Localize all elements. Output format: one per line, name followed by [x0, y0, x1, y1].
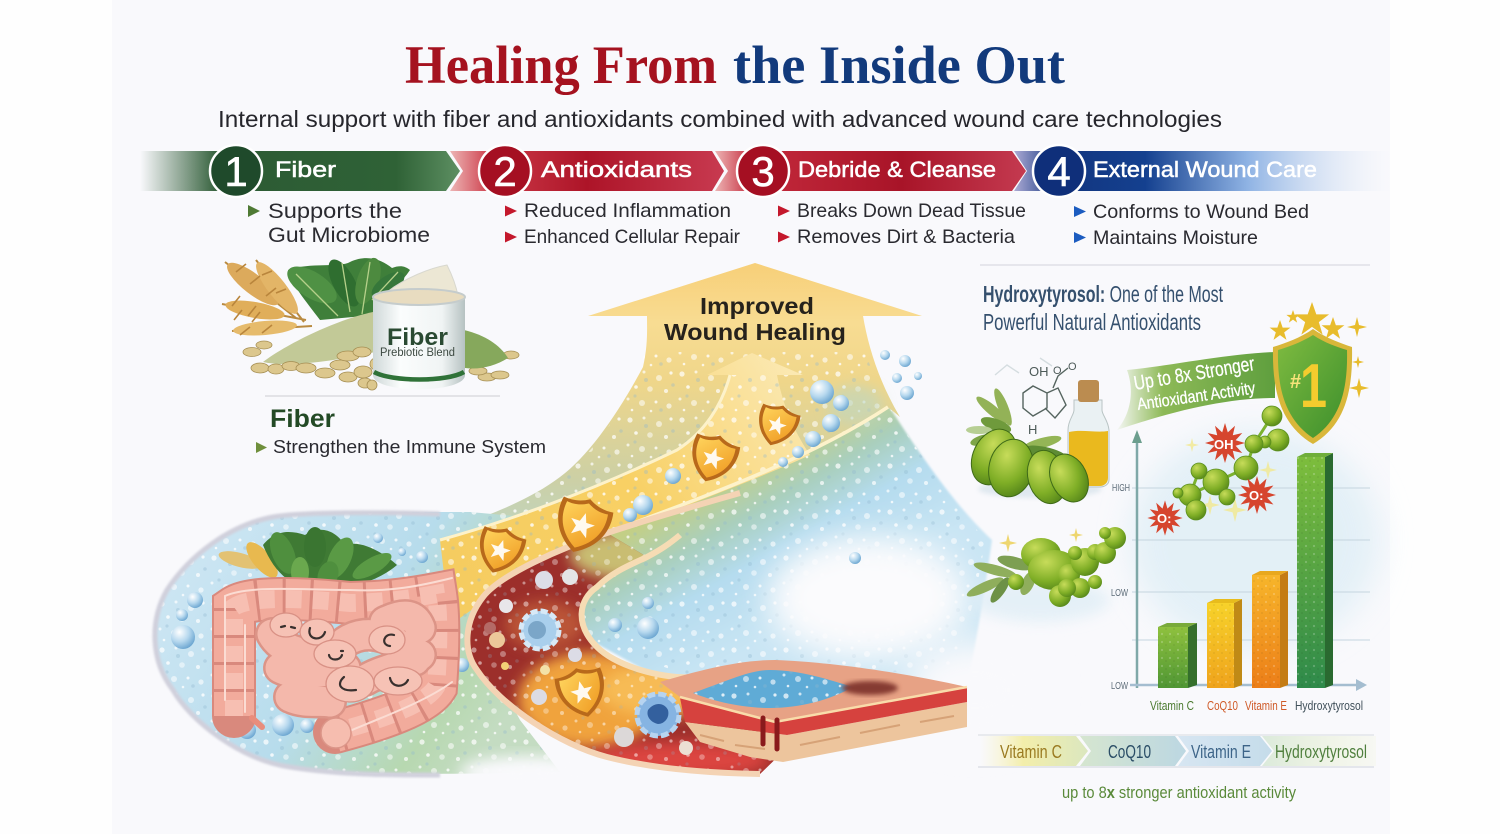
- step 2: antioxidants: [450, 145, 724, 197]
- step 3: debride and cleanse: 3: [751, 148, 775, 195]
- shield: number one: 1: [1300, 352, 1327, 421]
- icon: olive branch: [965, 527, 1126, 607]
- icon: powder mound: [263, 312, 375, 364]
- icon: molecule diagram: [995, 358, 1077, 437]
- appendix: [252, 718, 262, 727]
- fiber sub-section: Strengthen the Immune System: [273, 436, 546, 457]
- molecule chain with free radicals: [1147, 406, 1289, 536]
- colon end: [321, 718, 351, 748]
- step 1: fiber: [140, 145, 460, 197]
- radical: O2 left: [1147, 500, 1183, 536]
- icon: fiber jar: Prebiotic Blend: [380, 347, 455, 359]
- golden band with shields path: [440, 353, 888, 625]
- shield: number one: #: [1290, 371, 1301, 393]
- title: Healing From: [405, 35, 717, 95]
- icon: immune cells: [484, 569, 693, 755]
- icon: molecule diagram: H: [1028, 422, 1037, 437]
- bullets: fiber: [248, 200, 430, 247]
- bullets: debride: [778, 200, 1026, 248]
- bar labels: Vitamin E: [1245, 699, 1287, 713]
- title: the Inside Out: [733, 35, 1065, 95]
- axis labels: [1111, 482, 1130, 692]
- wound block illustration: [660, 660, 967, 762]
- fiber sub-section: Fiber: [270, 405, 335, 433]
- bar labels: Vitamin C: [1150, 699, 1194, 713]
- chevron: vitamin e: Vitamin E: [1191, 742, 1251, 762]
- step 4: external wound care: 4: [1047, 148, 1071, 195]
- step 2: antioxidants: 2: [493, 148, 517, 195]
- step 3: debride and cleanse: Debride & Cleanse: [798, 157, 996, 182]
- bullets: external care: Conforms to Wound Bed: [1093, 201, 1309, 223]
- icon: molecule diagram: OH: [1029, 364, 1048, 379]
- axis labels: LOW: [1111, 680, 1128, 692]
- bar: hydroxytyrosol: [1297, 453, 1333, 688]
- gut illustration: [217, 527, 452, 748]
- chevron: hydroxytyrosol: Hydroxytyrosol: [1275, 742, 1367, 762]
- shield: number one: [1270, 302, 1369, 444]
- icon: seeds: [243, 341, 519, 390]
- bullets: external care: [1074, 201, 1309, 249]
- bar labels: [1150, 699, 1363, 713]
- fiber product illustration: [222, 255, 519, 390]
- label: improved wound healing: Improved: [700, 293, 814, 319]
- bullets: debride: Breaks Down Dead Tissue: [797, 200, 1026, 222]
- step 2: antioxidants: Antioxidants: [541, 157, 692, 182]
- divider right panel: [980, 264, 1370, 266]
- icon: fiber jar: Fiber: [387, 324, 448, 351]
- chevron: coq10: [1080, 736, 1186, 766]
- icon: molecule diagram: O: [1053, 365, 1062, 377]
- gut capsule: [155, 512, 600, 788]
- bullets: external care: Maintains Moisture: [1093, 227, 1258, 249]
- chevron: vitamin c: Vitamin C: [1000, 742, 1062, 762]
- axis labels: LOW: [1111, 587, 1128, 599]
- bar chart: [1111, 430, 1370, 713]
- hydroxytyrosol heading: Hydroxytyrosol: One of the Most: [983, 281, 1223, 307]
- step 1: fiber: 1: [224, 148, 248, 195]
- top surface: [660, 660, 967, 722]
- chevron: vitamin e: [1178, 736, 1272, 766]
- intestine coils: [270, 613, 422, 702]
- icon: herb pile: [464, 330, 508, 369]
- axis labels: HIGH: [1112, 482, 1130, 494]
- icon: molecule diagram: O: [1068, 361, 1077, 373]
- chevron: hydroxytyrosol: [1262, 736, 1376, 766]
- colon: [234, 594, 438, 732]
- bubbles in flow: [171, 350, 922, 739]
- hydroxytyrosol heading: [983, 281, 1223, 335]
- chevron: coq10: CoQ10: [1108, 742, 1151, 762]
- footnote: up to 8x stronger antioxidant activity: [1062, 783, 1296, 802]
- radical: OH: OH: [1214, 437, 1234, 452]
- chart backdrop mist: [970, 430, 1380, 650]
- step 4: external wound care: [1014, 145, 1392, 197]
- label: improved wound healing: [664, 293, 846, 345]
- stars: [1270, 302, 1369, 398]
- bullets: antioxidants: Reduced Inflammation: [524, 200, 731, 222]
- chevron: vitamin c: [980, 736, 1088, 766]
- improved wound healing arrow: [430, 263, 922, 620]
- subtitle: Internal support with fiber and antioxidants combined with advanced wound care technologies: [218, 106, 1222, 132]
- title: [405, 35, 1065, 95]
- icon: fiber jar: [373, 265, 465, 389]
- icon: leaves: [281, 255, 410, 320]
- bullets: fiber: Supports the: [268, 200, 402, 223]
- tissue layer: [685, 702, 967, 762]
- banner: up to 8x stronger: Antioxidant Activity: [1136, 379, 1257, 414]
- icon: olive oil bottle: [1068, 380, 1109, 487]
- bullets: fiber: Gut Microbiome: [268, 224, 430, 247]
- step 4: external wound care: External Wound Care: [1093, 157, 1317, 182]
- axes: [1136, 440, 1138, 688]
- wound pipe: [464, 490, 774, 777]
- label: improved wound healing: Wound Healing: [664, 319, 846, 345]
- bullets: antioxidants: [505, 200, 740, 248]
- radical: O2 right: [1238, 476, 1276, 514]
- grid lines: [1132, 488, 1370, 640]
- bar labels: Hydroxytyrosol: [1295, 699, 1363, 713]
- wheat on top: [217, 537, 283, 583]
- icon: olives with leaves: [963, 387, 1096, 508]
- blue mist field: [560, 405, 1045, 740]
- bullets: antioxidants: Enhanced Cellular Repair: [524, 226, 740, 248]
- bar: coq10: [1207, 599, 1242, 688]
- wound bed: [693, 670, 853, 708]
- hydroxytyrosol heading: Powerful Natural Antioxidants: [983, 309, 1201, 335]
- ranking strip: [978, 735, 1376, 767]
- blood drips: [763, 718, 777, 749]
- step ribbon: [140, 145, 1392, 197]
- icon: wheat: [222, 256, 312, 338]
- step 3: debride and cleanse: [715, 145, 1026, 197]
- banner: up to 8x stronger: Up to 8x Stronger: [1132, 353, 1256, 395]
- bullets: debride: Removes Dirt & Bacteria: [797, 226, 1015, 248]
- small intestine: [272, 616, 420, 702]
- fiber sub-section: [256, 396, 546, 457]
- radical: OH: [1205, 423, 1245, 463]
- step 1: fiber: Fiber: [275, 157, 336, 182]
- herbs on top: [263, 527, 397, 592]
- banner: up to 8x stronger: [1117, 352, 1275, 430]
- red layer: [680, 688, 967, 735]
- bar: vitamin e: [1252, 571, 1288, 688]
- radical: O2 left: O:: [1157, 511, 1171, 526]
- bar: vitamin c: [1158, 623, 1197, 688]
- radical: O2 right: O:: [1249, 488, 1263, 503]
- bar labels: CoQ10: [1207, 699, 1238, 713]
- shield badges on flow: [471, 399, 803, 723]
